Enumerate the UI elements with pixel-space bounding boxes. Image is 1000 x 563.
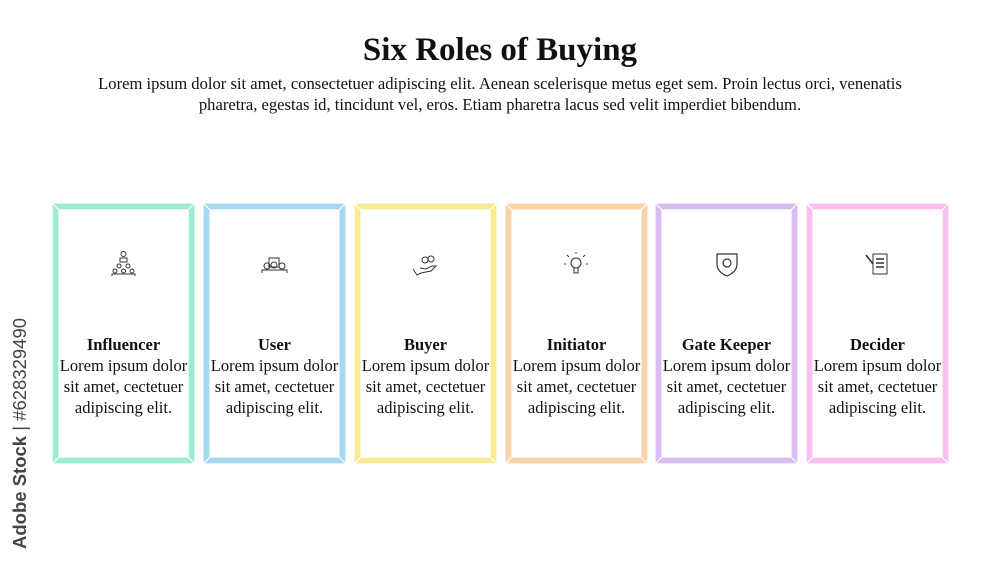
card: Decider: Lorem ipsum dolor <box>814 356 942 375</box>
card: Influencer: adipiscing elit. <box>75 398 172 417</box>
title: Six Roles of Buying <box>363 32 637 68</box>
icon: document with pen <box>866 254 887 274</box>
watermark: Adobe Stock | #628329490 <box>9 318 30 549</box>
card: Gate Keeper: sit amet, cectetuer <box>667 377 787 396</box>
card: User: sit amet, cectetuer <box>215 377 335 396</box>
icon: shield dollar <box>717 254 737 276</box>
card: Buyer <box>354 203 497 464</box>
icon: people <box>262 258 287 273</box>
card: Initiator: Lorem ipsum dolor <box>513 356 641 375</box>
card: Initiator: Initiator <box>547 335 606 354</box>
card: Buyer: sit amet, cectetuer <box>366 377 486 396</box>
card: User: adipiscing elit. <box>226 398 323 417</box>
card: Decider: sit amet, cectetuer <box>818 377 938 396</box>
intro paragraph: pharetra, egestas id, tincidunt vel, eros. Etiam pharetra lacus sed velit imperdiet bibendum. <box>199 94 801 114</box>
card: User: User <box>258 335 291 354</box>
card: Decider: Decider <box>850 335 905 354</box>
card: Initiator: adipiscing elit. <box>528 398 625 417</box>
card: Gate Keeper: Gate Keeper <box>682 335 771 354</box>
icon: lightbulb <box>564 252 588 273</box>
card: User: Lorem ipsum dolor <box>211 356 339 375</box>
icon: hierarchy <box>112 252 135 276</box>
card: Influencer: Influencer <box>87 335 160 354</box>
card: Influencer: sit amet, cectetuer <box>64 377 184 396</box>
card: Influencer <box>52 203 195 464</box>
intro paragraph <box>98 74 902 114</box>
card: Gate Keeper: adipiscing elit. <box>678 398 775 417</box>
card: Decider: adipiscing elit. <box>829 398 926 417</box>
card: Influencer: Lorem ipsum dolor <box>60 356 188 375</box>
card: Buyer: adipiscing elit. <box>377 398 474 417</box>
icon: hand with coins <box>413 256 436 275</box>
intro paragraph: Lorem ipsum dolor sit amet, consectetuer adipiscing elit. Aenean scelerisque metus eget sem. Proin lectus orci, venenatis <box>98 74 902 93</box>
card: Initiator: sit amet, cectetuer <box>517 377 637 396</box>
card: Gate Keeper: Lorem ipsum dolor <box>663 356 791 375</box>
card: Decider <box>806 203 949 464</box>
card: Initiator <box>505 203 648 464</box>
card: User <box>203 203 346 464</box>
card: Gate Keeper <box>655 203 798 464</box>
card: Buyer: Buyer <box>404 335 447 354</box>
card: Buyer: Lorem ipsum dolor <box>362 356 490 375</box>
